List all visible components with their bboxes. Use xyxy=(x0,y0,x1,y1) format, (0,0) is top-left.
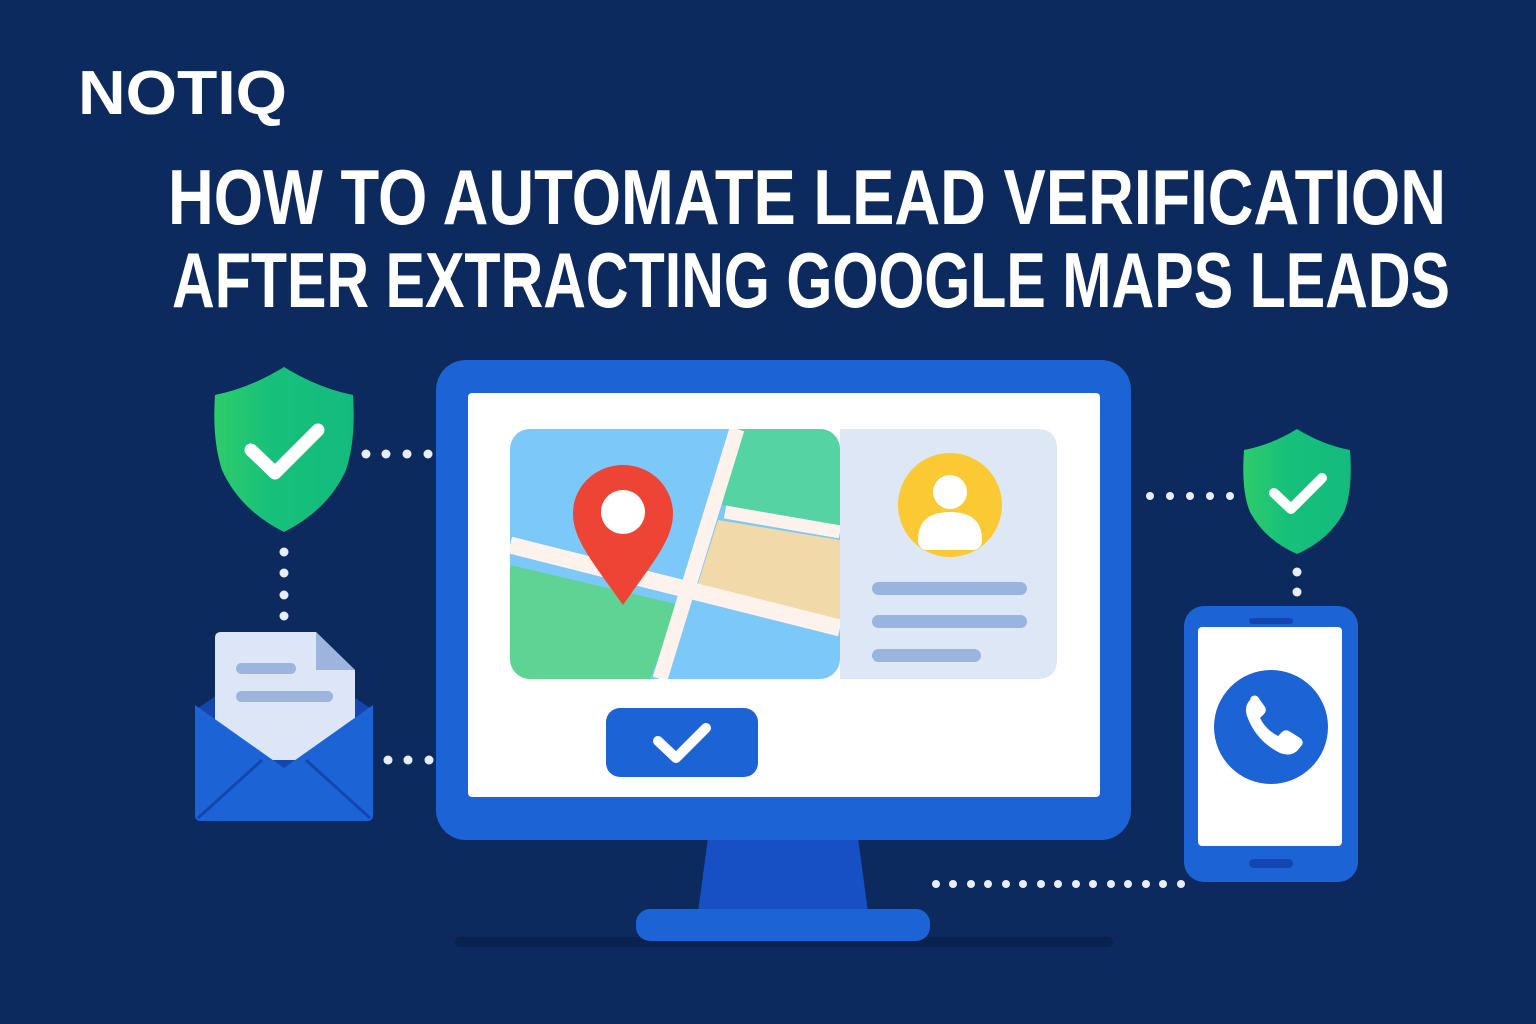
contact card xyxy=(840,429,1057,679)
map panel xyxy=(510,429,840,679)
icon: envelope with letter xyxy=(195,632,373,821)
icon: smartphone with call xyxy=(1184,606,1358,882)
icon: location pin xyxy=(573,465,673,605)
monitor xyxy=(436,360,1131,947)
icon: left shield with check xyxy=(214,367,354,532)
title xyxy=(168,153,1450,324)
dotted connectors xyxy=(280,450,1302,888)
check button xyxy=(606,708,758,777)
icon: right shield with check xyxy=(1243,429,1351,554)
logo: NOTIQ: NOTIQ xyxy=(78,59,287,128)
